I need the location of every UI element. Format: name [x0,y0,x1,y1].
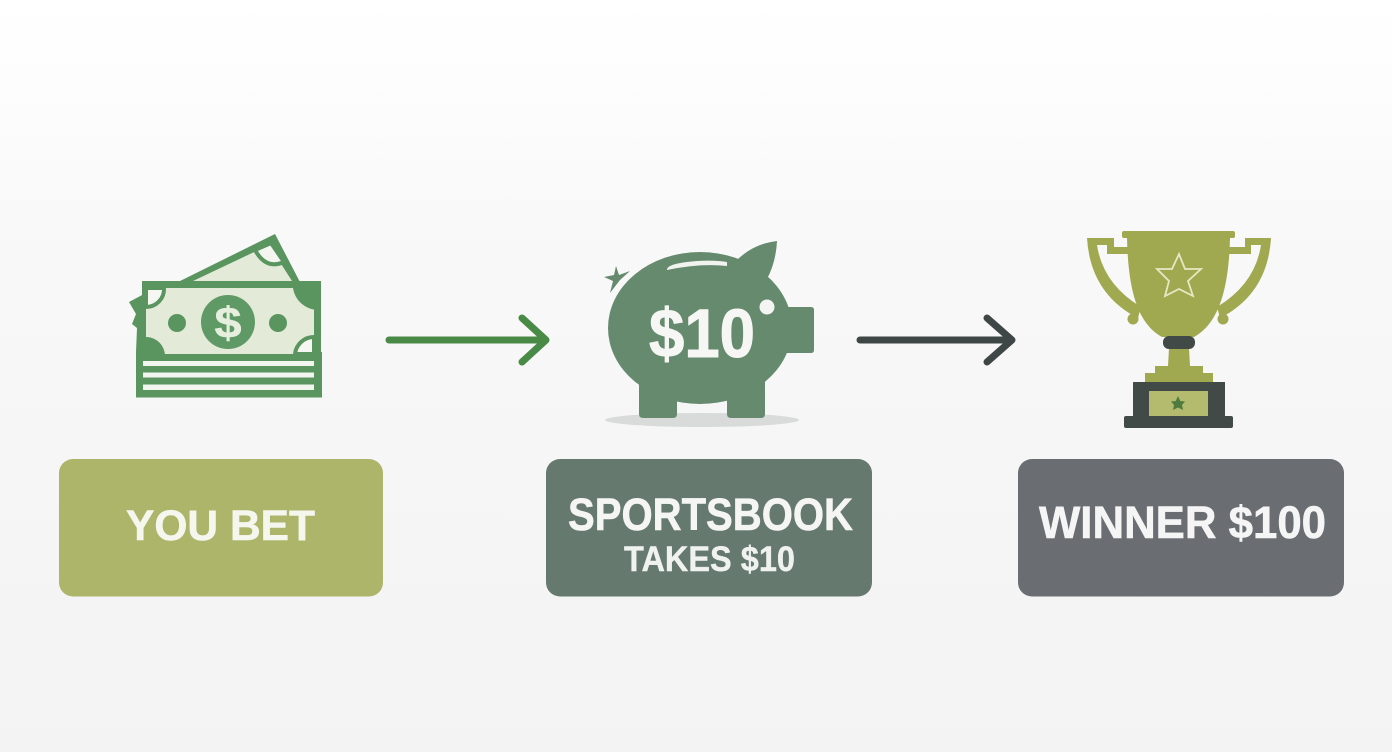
handle curls [1128,314,1228,324]
label: WINNER $100 [1039,497,1326,548]
sparkle [604,266,630,293]
label line 2: TAKES $10 [624,540,795,579]
dollar sign: $ [214,299,242,348]
plate [1149,391,1208,416]
icon: piggy bank [604,241,814,427]
panel: you bet [59,459,383,596]
arrow: sportsbook to winner [860,318,1012,362]
label: YOU BET [126,502,315,550]
panel: winner $100 [1018,459,1344,596]
amount: $10 [649,295,755,372]
center medallion [201,295,255,349]
cup star outline [1157,254,1201,296]
arrow: bet to sportsbook [389,318,546,362]
dark collar [1163,336,1195,349]
label line 1: SPORTSBOOK [568,489,853,540]
pig body [608,241,814,418]
plate star [1171,396,1185,410]
back bill [178,234,301,284]
right dot [269,314,287,332]
base [1124,382,1233,428]
cup [1122,231,1235,337]
handles [1087,238,1271,318]
left dot [168,314,186,332]
shadow [605,413,799,427]
stem and steps [1145,348,1213,382]
icon: stack of money [129,234,322,398]
eye [760,300,774,314]
front bill [137,281,321,361]
stack of notes [136,352,322,398]
icon: trophy [1087,231,1271,428]
left edge of rear bill [129,294,150,352]
coin slot [667,261,727,270]
panel: sportsbook takes $10 [546,459,872,596]
